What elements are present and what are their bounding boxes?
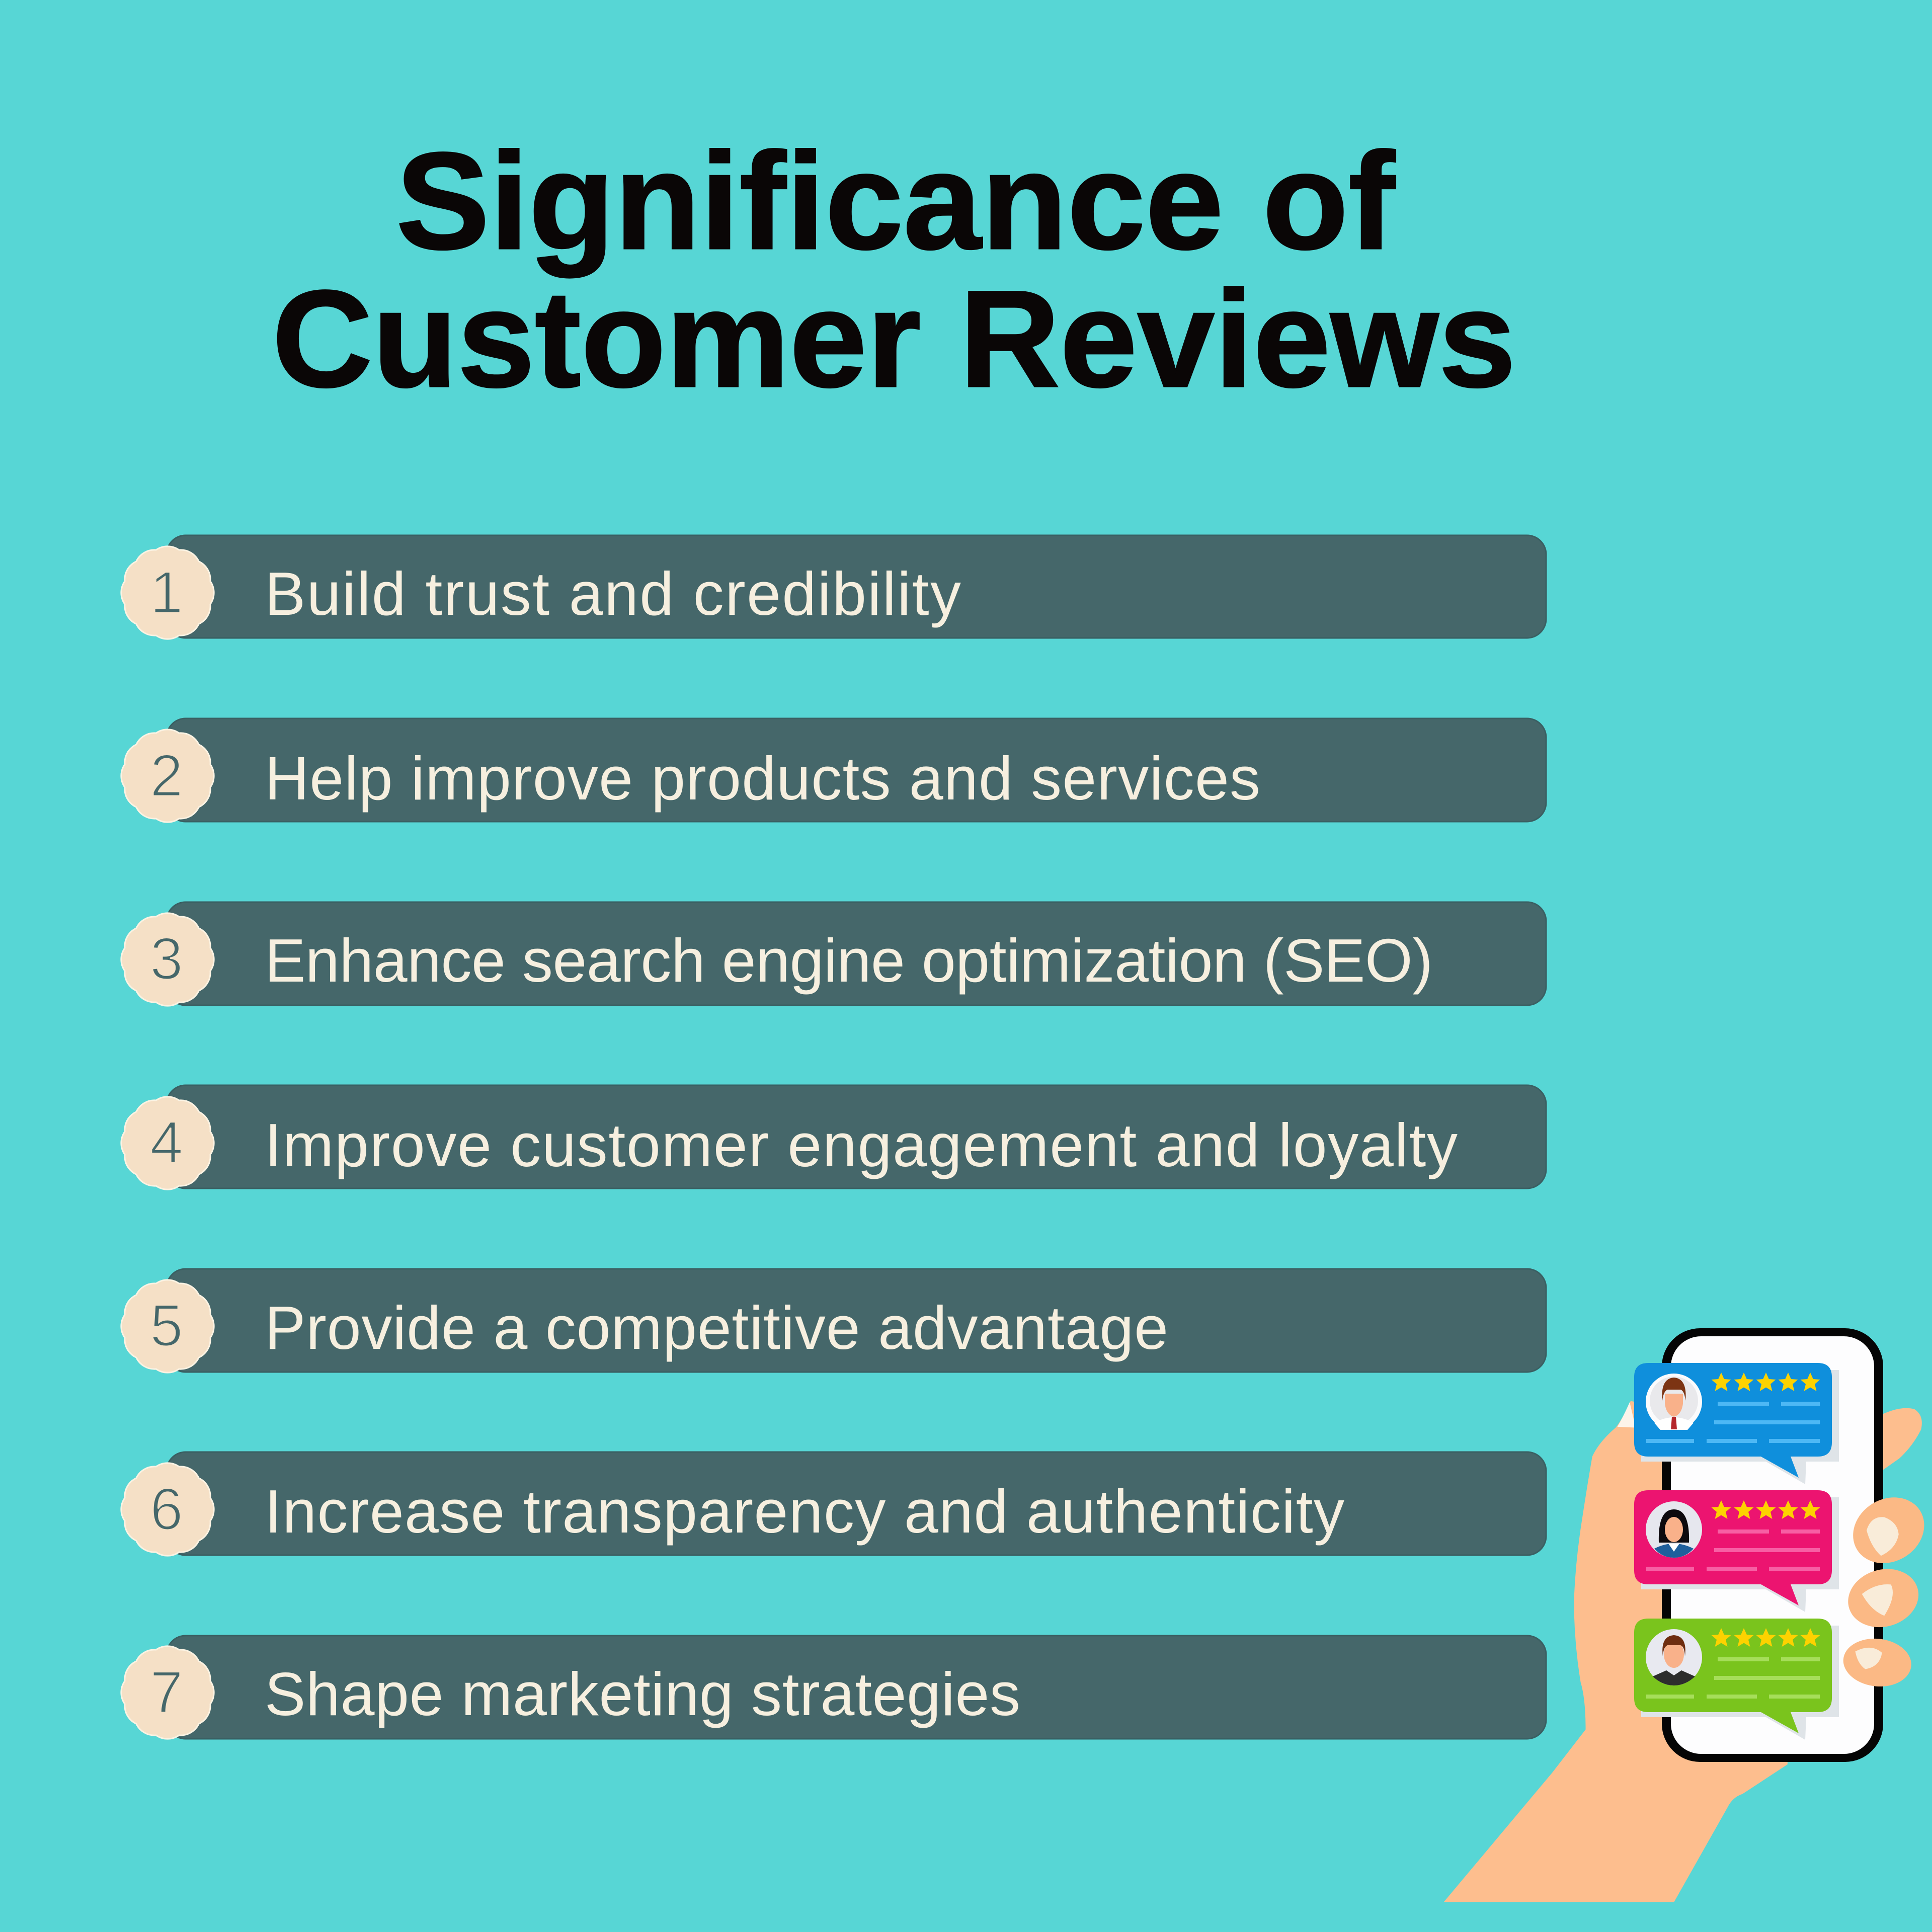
list item 4 (121, 1085, 1546, 1189)
review card: pink (1634, 1490, 1839, 1612)
avatar: woman (1646, 1501, 1702, 1558)
text lines (1646, 1404, 1820, 1441)
list item 3: Enhance search engine optimization (SEO) (265, 926, 1433, 995)
list item 3 (121, 902, 1546, 1006)
title (272, 124, 1516, 416)
list item 3: 3 (150, 926, 183, 992)
text lines (1646, 1659, 1820, 1697)
avatar: man in suit (1646, 1629, 1702, 1685)
review card: green (1634, 1619, 1839, 1740)
rating stars (1712, 1373, 1820, 1391)
list item 2 (121, 718, 1546, 822)
list item 6 (121, 1452, 1546, 1556)
avatar: man with tie (1646, 1374, 1702, 1430)
list item 5 (121, 1269, 1546, 1373)
illustration: hand holding phone with reviews (1444, 1328, 1930, 1902)
rating stars (1712, 1500, 1820, 1519)
title: Significance of (396, 124, 1397, 279)
list item 6: Increase transparency and authenticity (265, 1477, 1344, 1546)
list item 7 (121, 1636, 1546, 1739)
list item 2: 2 (150, 743, 183, 809)
list item 1: 1 (150, 559, 183, 626)
title: Customer Reviews (272, 262, 1516, 416)
rating stars (1712, 1628, 1820, 1647)
list item 7: 7 (150, 1659, 183, 1726)
list item 5: 5 (150, 1293, 183, 1359)
list item 7: Shape marketing strategies (265, 1660, 1020, 1728)
list item 6: 6 (150, 1476, 183, 1543)
icon: fingers (1842, 1489, 1930, 1689)
review card: blue (1634, 1363, 1839, 1484)
list item 2: Help improve products and services (265, 744, 1260, 813)
list item 5: Provide a competitive advantage (265, 1294, 1168, 1362)
list item 1 (121, 535, 1546, 639)
list item 4: 4 (150, 1109, 183, 1176)
text lines (1646, 1532, 1820, 1569)
list item 1: Build trust and credibility (265, 559, 961, 628)
icon: hand and thumb (1444, 1401, 1922, 1902)
list item 4: Improve customer engagement and loyalty (265, 1111, 1458, 1179)
icon: phone (1662, 1328, 1883, 1762)
